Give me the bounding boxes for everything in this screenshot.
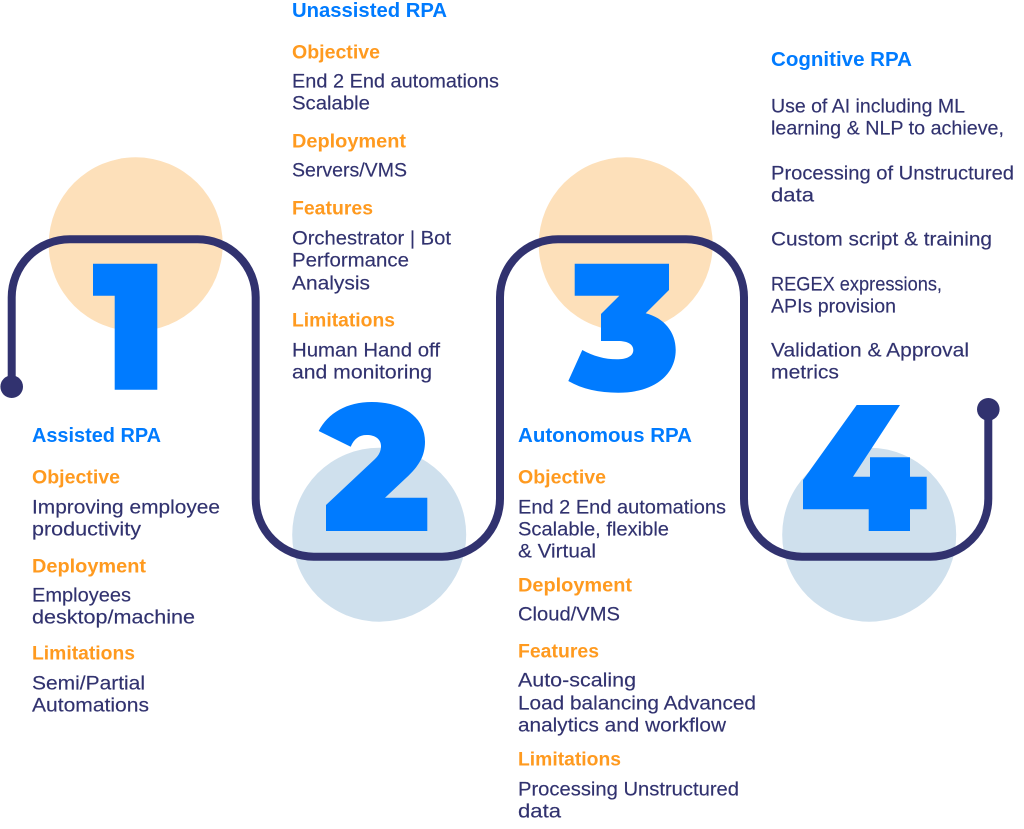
label: Deployment: Deployment [32, 556, 147, 577]
text: limitations [32, 674, 149, 717]
text: objective: productivity [32, 520, 142, 541]
label: Features: Features [518, 641, 599, 662]
text: unstructured data [771, 164, 1014, 207]
text: limitations: Automations [32, 696, 149, 717]
circle: step 3 background [539, 157, 713, 331]
text: limitations [292, 341, 441, 384]
text: features: analytics and workflow [518, 716, 726, 737]
heading: Autonomous RPA: Autonomous RPA [518, 424, 692, 447]
heading: Assisted RPA: Assisted RPA [32, 424, 161, 447]
text: features: Performance [292, 251, 409, 272]
text: validation [771, 341, 969, 384]
text: deployment [32, 586, 195, 629]
label: Limitations: Limitations [32, 643, 135, 664]
text: objective [518, 498, 726, 563]
text: features [518, 671, 756, 737]
text: limitations [518, 780, 739, 823]
text: use of AI: learning & NLP to achieve, [771, 119, 1004, 140]
label: Objective: Objective [32, 467, 120, 488]
text: limitations: Human Hand off [292, 341, 441, 362]
text: objective: End 2 End automations [518, 498, 726, 519]
text: features: Auto-scaling [518, 671, 636, 692]
text: validation: Validation & Approval [771, 341, 969, 362]
numeral 1 [93, 264, 157, 390]
text: regex and APIs [771, 275, 942, 318]
circle: step 2 background [292, 448, 466, 622]
connector: winding path with end dots [0, 239, 1000, 557]
panel: Cognitive RPA [771, 48, 1014, 384]
label: Objective: Objective [518, 467, 606, 488]
circle: step 4 background [782, 448, 956, 622]
panel: Assisted RPA [32, 424, 220, 717]
text: objective: Scalable [292, 94, 370, 115]
circle: step 1 background [49, 157, 223, 331]
text: deployment: Employees [32, 586, 131, 607]
text: regex and APIs: REGEX expressions, [771, 275, 942, 296]
text: objective: Scalable, flexible [518, 520, 669, 541]
text: objective: End 2 End automations [292, 72, 499, 93]
text: deployment: desktop/machine [32, 608, 195, 629]
text: limitations: Processing Unstructured [518, 780, 739, 801]
label: Deployment: Deployment [518, 575, 633, 596]
label: Deployment: Deployment [292, 131, 407, 152]
numeral 4 [803, 405, 927, 531]
numeral 3 [568, 264, 676, 393]
text: validation: metrics [771, 363, 839, 384]
label: Limitations: Limitations [292, 310, 395, 331]
heading: Cognitive RPA: Cognitive RPA [771, 48, 912, 71]
text: features: Load balancing Advanced [518, 694, 756, 715]
text: objective: Improving employee [32, 498, 220, 519]
text: objective [292, 72, 499, 115]
text: unstructured data: data [771, 186, 814, 207]
text: limitations: data [518, 802, 561, 823]
text: unstructured data: Processing of Unstructured [771, 164, 1014, 185]
panel: Unassisted RPA [292, 0, 499, 384]
text: custom script: Custom script & training [771, 230, 992, 251]
text: use of AI: Use of AI including ML [771, 97, 965, 118]
text: objective [32, 498, 220, 541]
text: deployment: Servers/VMS [292, 161, 407, 182]
text: use of AI [771, 97, 1004, 140]
label: Objective: Objective [292, 42, 380, 63]
text: objective: & Virtual [518, 542, 596, 563]
text: features [292, 229, 452, 295]
text: features: Orchestrator | Bot [292, 229, 452, 250]
text: features: Analysis [292, 274, 370, 295]
text: regex and APIs: APIs provision [771, 297, 896, 318]
label: Limitations: Limitations [518, 749, 621, 770]
panel: Autonomous RPA [518, 424, 756, 823]
label: Features: Features [292, 198, 373, 219]
text: limitations: Semi/Partial [32, 674, 145, 695]
text: deployment: Cloud/VMS [518, 605, 620, 626]
text: limitations: and monitoring [292, 363, 432, 384]
numeral 2 [319, 402, 427, 531]
